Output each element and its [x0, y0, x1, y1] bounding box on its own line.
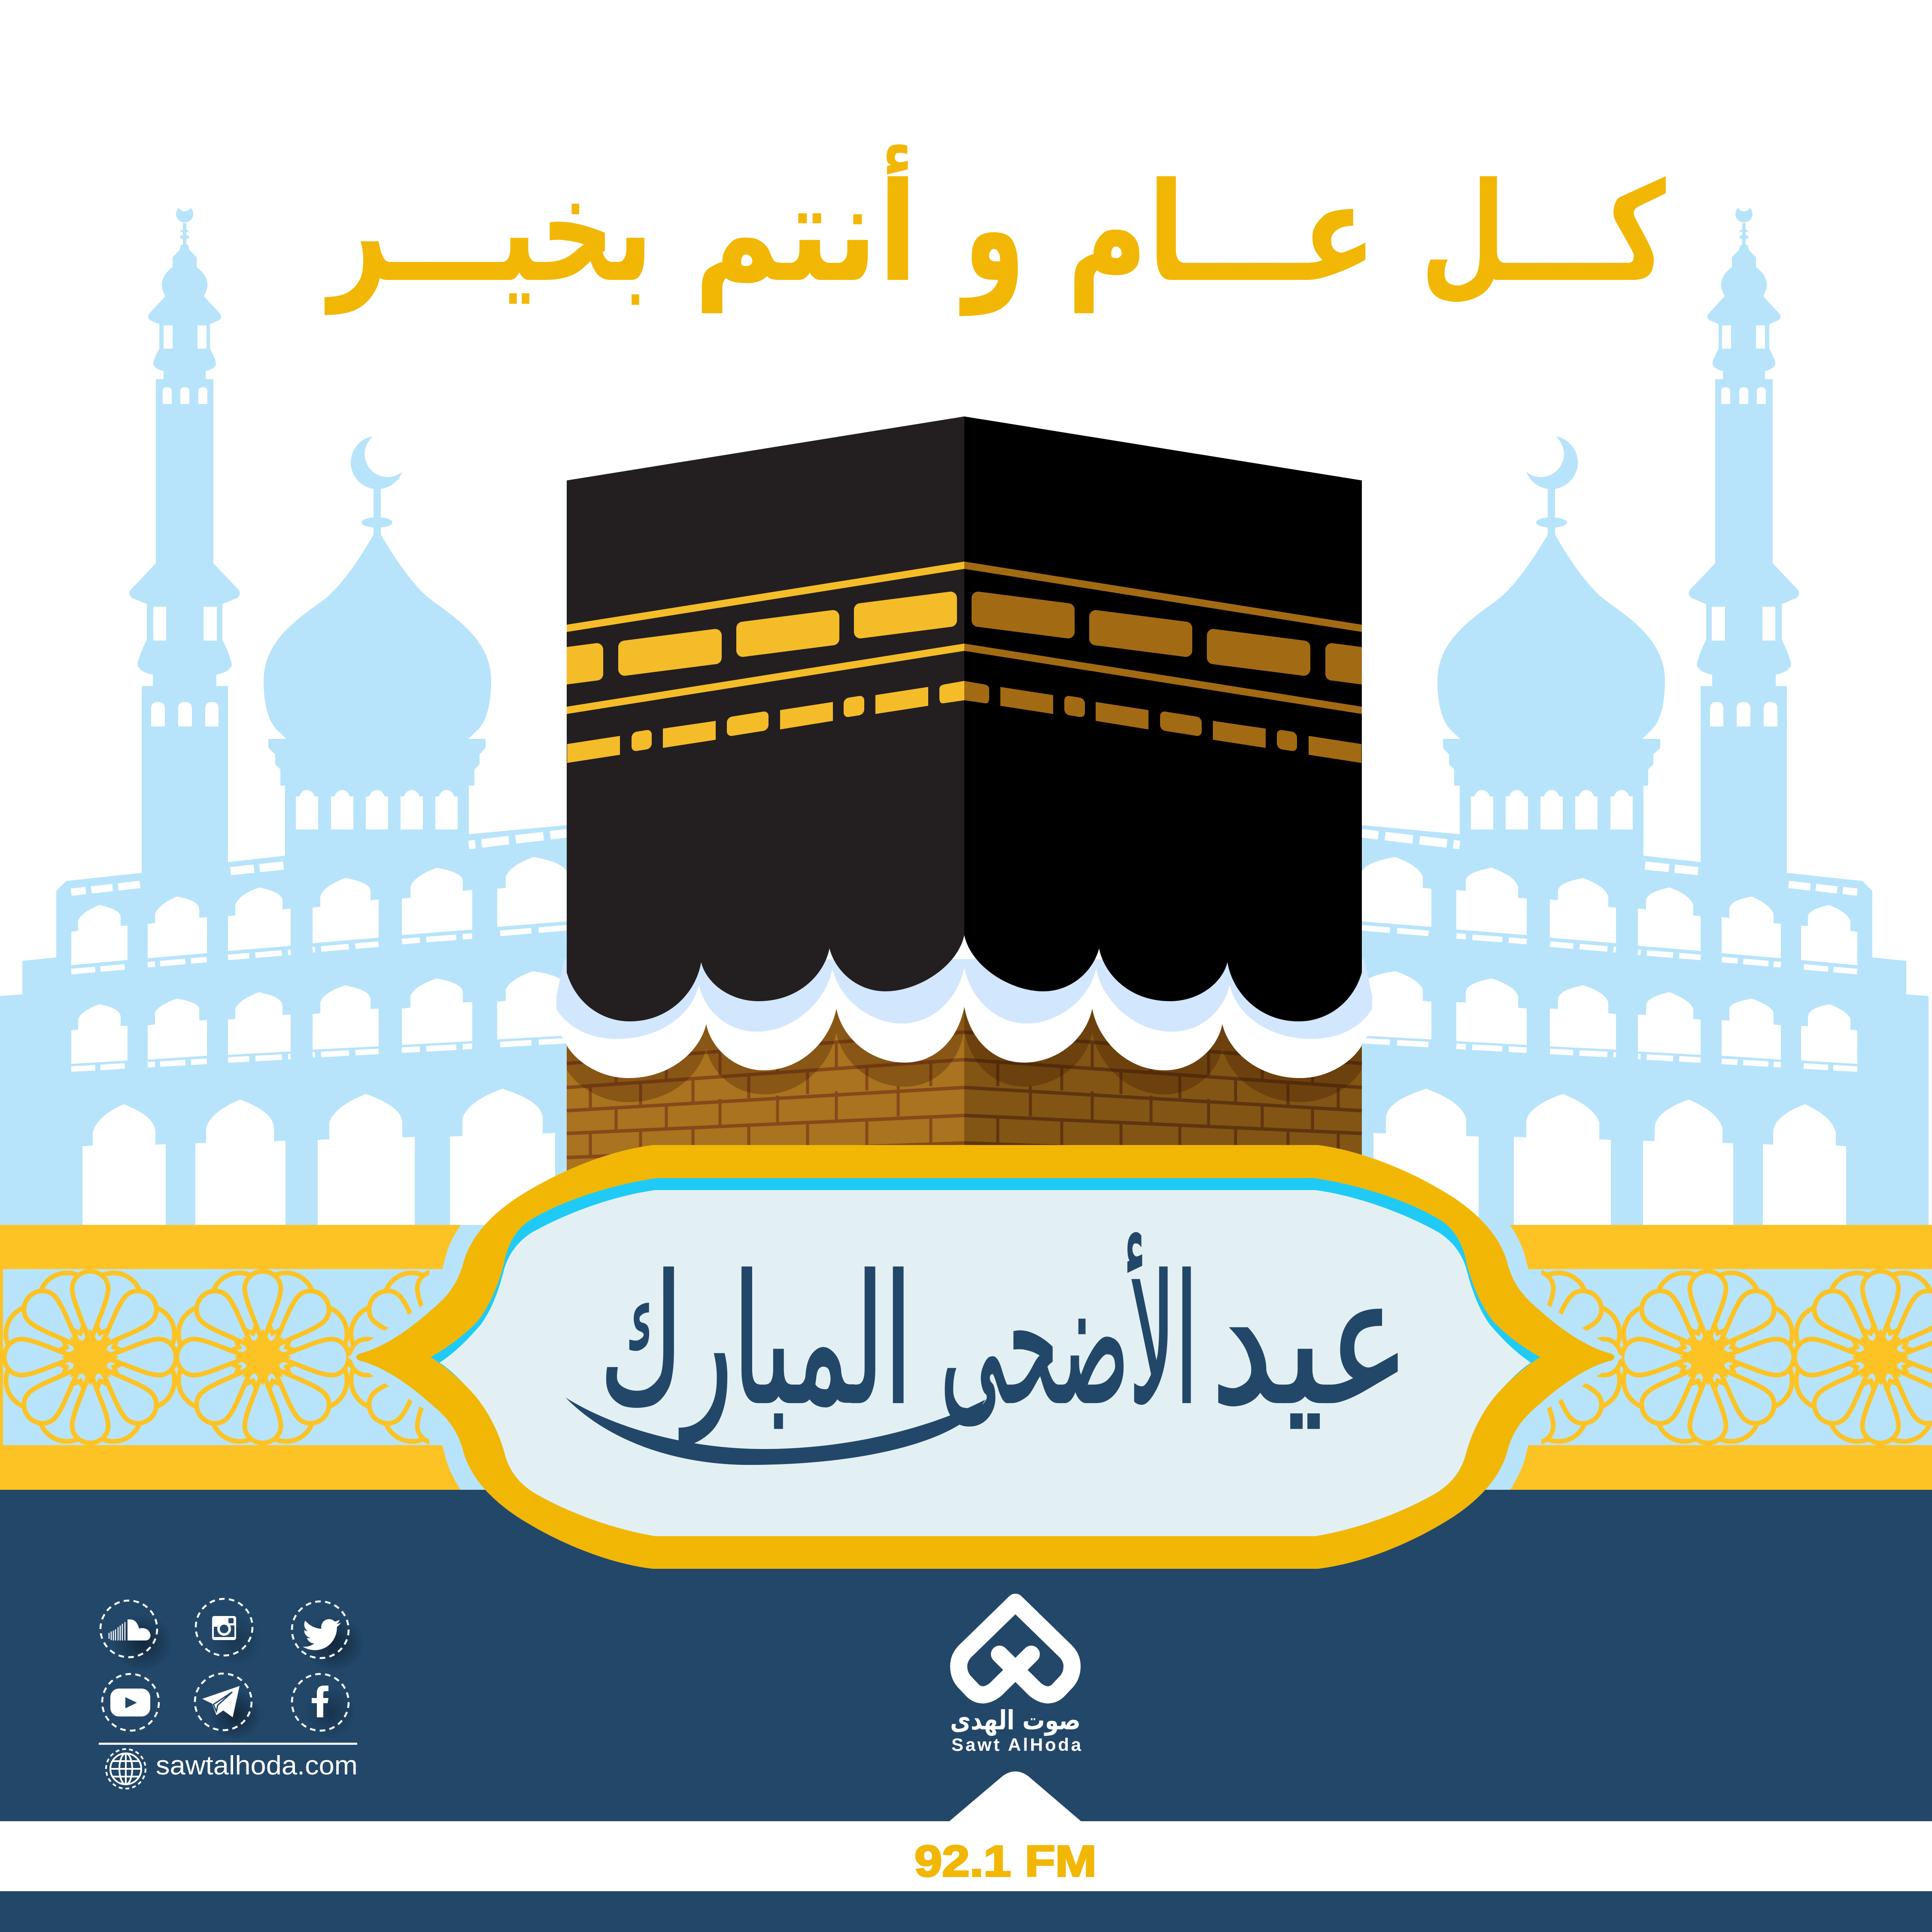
ornamental band right [1413, 1225, 1932, 1490]
icon: telegram [195, 1674, 262, 1741]
icon: facebook [292, 1674, 357, 1739]
gold frame [356, 1145, 1614, 1569]
mosque silhouette right [1362, 208, 1929, 1225]
curtain shadow on stones [567, 1007, 1362, 1102]
black curtain [567, 416, 1362, 1021]
logo arabic name: صوت الهدى [950, 1704, 1081, 1736]
website text: sawtalhoda.com [156, 1751, 358, 1780]
gold belt right face [964, 562, 1375, 763]
white frequency strip [0, 1821, 1932, 1891]
ornamental band left [0, 1225, 558, 1490]
logo mark [959, 1602, 1072, 1695]
icon: twitter [292, 1601, 364, 1672]
title greeting: عـــام [1067, 153, 1376, 314]
icon: instagram [196, 1599, 262, 1666]
title greeting: و [959, 143, 1025, 317]
mosque silhouette left [0, 208, 567, 1225]
title greeting: كـــل [1421, 153, 1667, 312]
title greeting: أنتم [694, 143, 918, 314]
icon: soundcloud [100, 1601, 173, 1671]
eid calligraphy text [600, 1231, 1411, 1446]
social media icons [99, 1599, 364, 1789]
eid calligraphy text: المبارك [600, 1238, 912, 1446]
title greeting: بخيـــر [324, 147, 653, 316]
central plaque frame [356, 1145, 1614, 1569]
kaaba [554, 416, 1375, 1172]
icon: youtube [102, 1674, 159, 1731]
navy footer background [0, 1490, 1932, 1932]
eid calligraphy text: عيد [1211, 1238, 1411, 1443]
kaaba base stones [567, 987, 1362, 1172]
icon: globe [106, 1749, 146, 1789]
gold belt left face [554, 562, 964, 763]
eid calligraphy text: الأضحى [940, 1231, 1198, 1443]
title greeting [324, 143, 1667, 317]
cream panel [440, 1190, 1531, 1536]
radio logo [950, 1602, 1081, 1755]
cyan accent [431, 1178, 1540, 1536]
white fringe [560, 987, 1368, 1078]
pale blue fringe [556, 959, 1372, 1039]
decorative flourish [565, 1397, 985, 1465]
logo english name: Sawt AlHoda [951, 1735, 1081, 1755]
frequency text: 92.1 FM [914, 1837, 1097, 1886]
white notch above strip [949, 1771, 1081, 1822]
divider line [99, 1743, 357, 1745]
